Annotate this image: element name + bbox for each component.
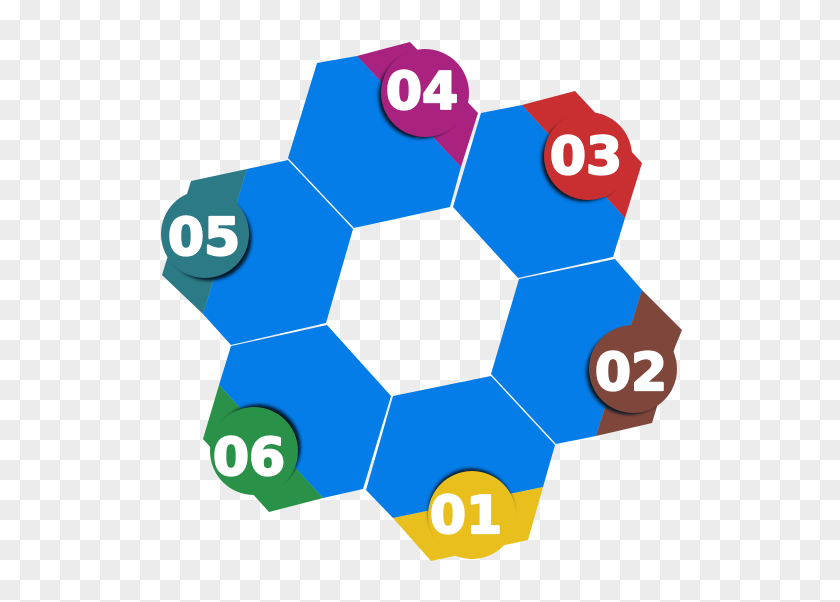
badge shadow 05 [166, 196, 252, 280]
badge circle 03 [544, 112, 632, 200]
badge shadow 01 [428, 468, 514, 554]
number 03: 03 [550, 127, 622, 187]
brown corner 02 [596, 290, 682, 436]
blue hexagon 01 [366, 376, 555, 518]
segment 01 [366, 376, 555, 561]
segment 04 [288, 42, 478, 228]
segment 02 [491, 259, 682, 444]
purple corner 04 [357, 42, 478, 167]
badge shadow 03 [542, 116, 626, 202]
red corner 03 [522, 91, 642, 218]
teal corner 05 [162, 169, 247, 314]
number 01: 01 [430, 486, 502, 546]
badge circle 06 [210, 407, 298, 495]
badge shadow 06 [216, 404, 300, 490]
number 04: 04 [386, 62, 458, 122]
blue hexagon 06 [219, 325, 391, 498]
segment 03 [453, 91, 642, 278]
badge circle 05 [161, 190, 249, 278]
green corner 06 [203, 385, 323, 512]
blue hexagon 03 [453, 105, 625, 278]
number 02: 02 [595, 343, 667, 403]
segment 06 [203, 325, 391, 512]
badge circle 04 [381, 49, 469, 137]
badge circle 01 [428, 471, 516, 559]
blue hexagon 02 [491, 259, 642, 444]
yellow corner 01 [393, 487, 543, 561]
badge shadow 02 [586, 330, 672, 414]
blue hexagon 04 [288, 56, 461, 228]
number 05: 05 [168, 208, 240, 268]
blue hexagon 05 [203, 160, 353, 345]
number 06: 06 [213, 428, 285, 488]
badge circle 02 [589, 325, 677, 413]
badge shadow 04 [378, 54, 464, 138]
segment 05 [161, 160, 353, 345]
